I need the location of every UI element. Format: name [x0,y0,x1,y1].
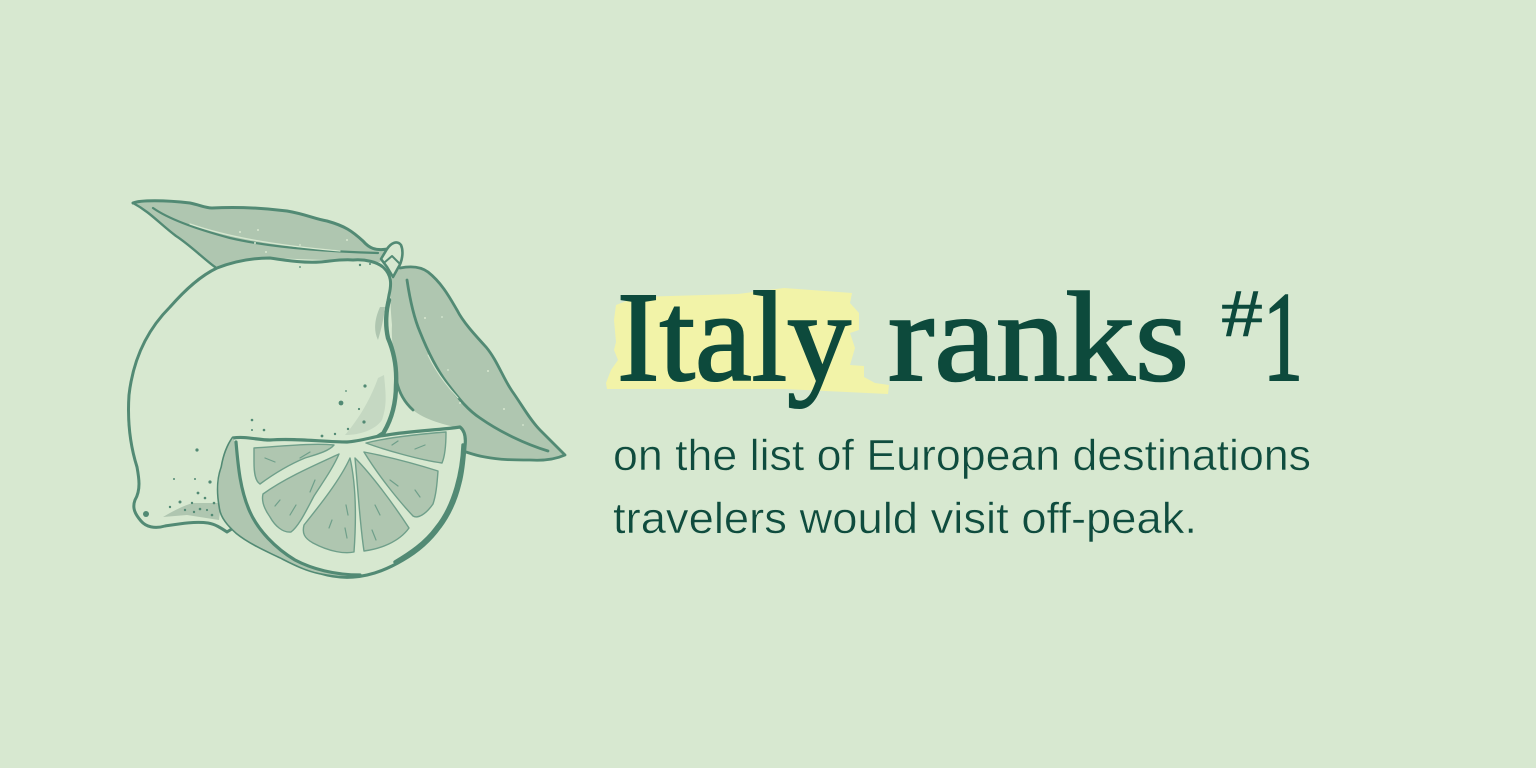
subtitle line 1: on the list of European destinations [613,431,1311,480]
wedge hatching [265,441,425,540]
title [617,266,1303,408]
subtitle line 2: travelers would visit off-peak. [613,494,1197,543]
title symbol: hash: # [1221,275,1263,351]
icon: lemon wedge [218,427,465,577]
title numeral: 1: 1 [1263,266,1303,408]
leaf specks [424,316,524,426]
leaf specks [239,229,348,253]
rind highlight [395,445,463,562]
icon: right leaf [390,267,565,460]
speckles [143,263,371,517]
icon: top leaf [133,201,388,268]
icon: lemon body [128,258,396,532]
highlight swatch behind Italy [606,288,889,394]
illustration: lemon with leaves and wedge [128,201,565,577]
subtitle [613,431,1311,543]
title word: Italy: Italy [617,266,851,408]
title word: ranks: ranks [888,266,1189,408]
icon: stem [381,242,402,277]
wedge segments [254,432,446,553]
